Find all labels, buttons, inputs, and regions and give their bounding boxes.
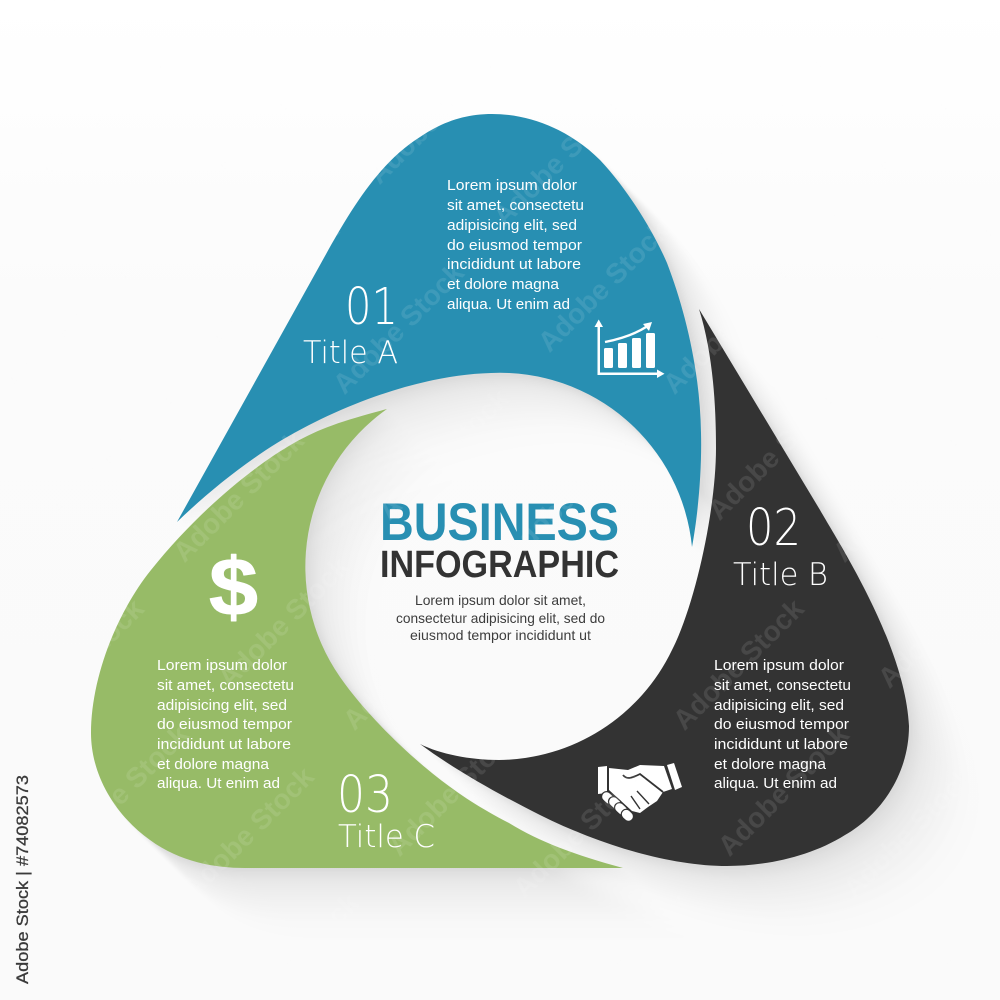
icon: dollar sign: $: [209, 542, 258, 633]
center text block: [396, 592, 605, 643]
watermark pattern: Adobe Stock: [382, 719, 525, 862]
watermark pattern: Adobe Stock: [692, 47, 835, 190]
watermark pattern: Adobe Stock: [827, 425, 970, 568]
watermark pattern: Adobe Stock: [42, 383, 185, 526]
watermark pattern: Adobe Stock: [507, 761, 650, 904]
text block B: et dolore magna: [714, 756, 827, 773]
text block A: Lorem ipsum dolor: [447, 177, 577, 194]
panel: 02 Title B dark segment: [420, 309, 909, 866]
text block A: adipisicing elit, sed: [447, 217, 577, 234]
watermark pattern: Adobe Stock: [702, 383, 845, 526]
text block B: adipisicing elit, sed: [714, 697, 844, 714]
text block A: do eiusmod tempor: [447, 237, 582, 254]
title B: Title B: [733, 557, 828, 593]
icon: bar chart: [594, 320, 664, 378]
text block A: [447, 177, 584, 313]
title C: Title C: [338, 819, 435, 855]
watermark pattern: Adobe Stock: [657, 257, 800, 400]
watermark pattern: Adobe Stock: [52, 719, 195, 862]
watermark pattern: Adobe Stock: [157, 89, 300, 232]
watermark pattern: Adobe Stock: [817, 89, 960, 232]
panel: 03 Title C green segment: [91, 409, 623, 868]
number 01: 01: [345, 278, 398, 337]
text block B: sit amet, consectetu: [714, 677, 851, 694]
heading: business infographic: [380, 493, 619, 586]
text block C: do eiusmod tempor: [157, 716, 292, 733]
text block A: sit amet, consectetu: [447, 197, 584, 214]
center text block: consectetur adipisicing elit, sed do: [396, 610, 605, 626]
text block C: adipisicing elit, sed: [157, 697, 287, 714]
watermark pattern: Adobe Stock: [202, 215, 345, 358]
text block B: [714, 657, 851, 792]
text block C: incididunt ut labore: [157, 736, 291, 753]
text block B: aliqua. Ut enim ad: [714, 775, 837, 792]
watermark pattern: Adobe Stock: [372, 383, 515, 526]
watermark pattern: Adobe Stock: [487, 89, 630, 232]
text block A: et dolore magna: [447, 276, 560, 293]
text block C: et dolore magna: [157, 756, 270, 773]
title A: Title A: [303, 335, 398, 371]
text block C: [157, 657, 294, 792]
text block C: sit amet, consectetu: [157, 677, 294, 694]
watermark pattern: Adobe Stock: [837, 761, 980, 904]
center text block: eiusmod tempor incididunt ut: [410, 627, 591, 643]
watermark pattern: Adobe Stock: [667, 593, 810, 736]
watermark pattern: Adobe Stock: [0, 257, 140, 400]
watermark pattern: Adobe Stock: [167, 425, 310, 568]
watermark pattern: Adobe Stock: [497, 425, 640, 568]
watermark pattern: Adobe Stock: [327, 257, 470, 400]
text block B: incididunt ut labore: [714, 736, 848, 753]
number 03: 03: [337, 766, 393, 825]
center text block: Lorem ipsum dolor sit amet,: [415, 592, 586, 608]
watermark pattern: Adobe Stock: [362, 47, 505, 190]
text block B: do eiusmod tempor: [714, 716, 849, 733]
stock id label: Adobe Stock | #74082573: [13, 775, 32, 984]
long shadows: [93, 116, 979, 938]
text block C: aliqua. Ut enim ad: [157, 775, 280, 792]
watermark pattern: Adobe Stock: [7, 593, 150, 736]
watermark pattern: Adobe Stock: [712, 719, 855, 862]
heading: business infographic: INFOGRAPHIC: [380, 544, 619, 586]
text block A: aliqua. Ut enim ad: [447, 296, 570, 313]
text block B: Lorem ipsum dolor: [714, 657, 844, 674]
panel: 01 Title A blue segment: [177, 114, 701, 547]
text block C: Lorem ipsum dolor: [157, 657, 287, 674]
watermark pattern: Adobe Stock: [32, 47, 175, 190]
watermark pattern: Adobe Stock: [532, 215, 675, 358]
watermark pattern: Adobe Stock: [542, 551, 685, 694]
heading: business infographic: BUSINESS: [380, 493, 619, 552]
text block A: incididunt ut labore: [447, 256, 581, 273]
watermark pattern: Adobe Stock: [337, 593, 480, 736]
icon: handshake: [598, 763, 682, 823]
number 02: 02: [746, 499, 801, 558]
watermark pattern: Adobe Stock: [212, 551, 355, 694]
watermark pattern: Adobe Stock: [177, 761, 320, 904]
